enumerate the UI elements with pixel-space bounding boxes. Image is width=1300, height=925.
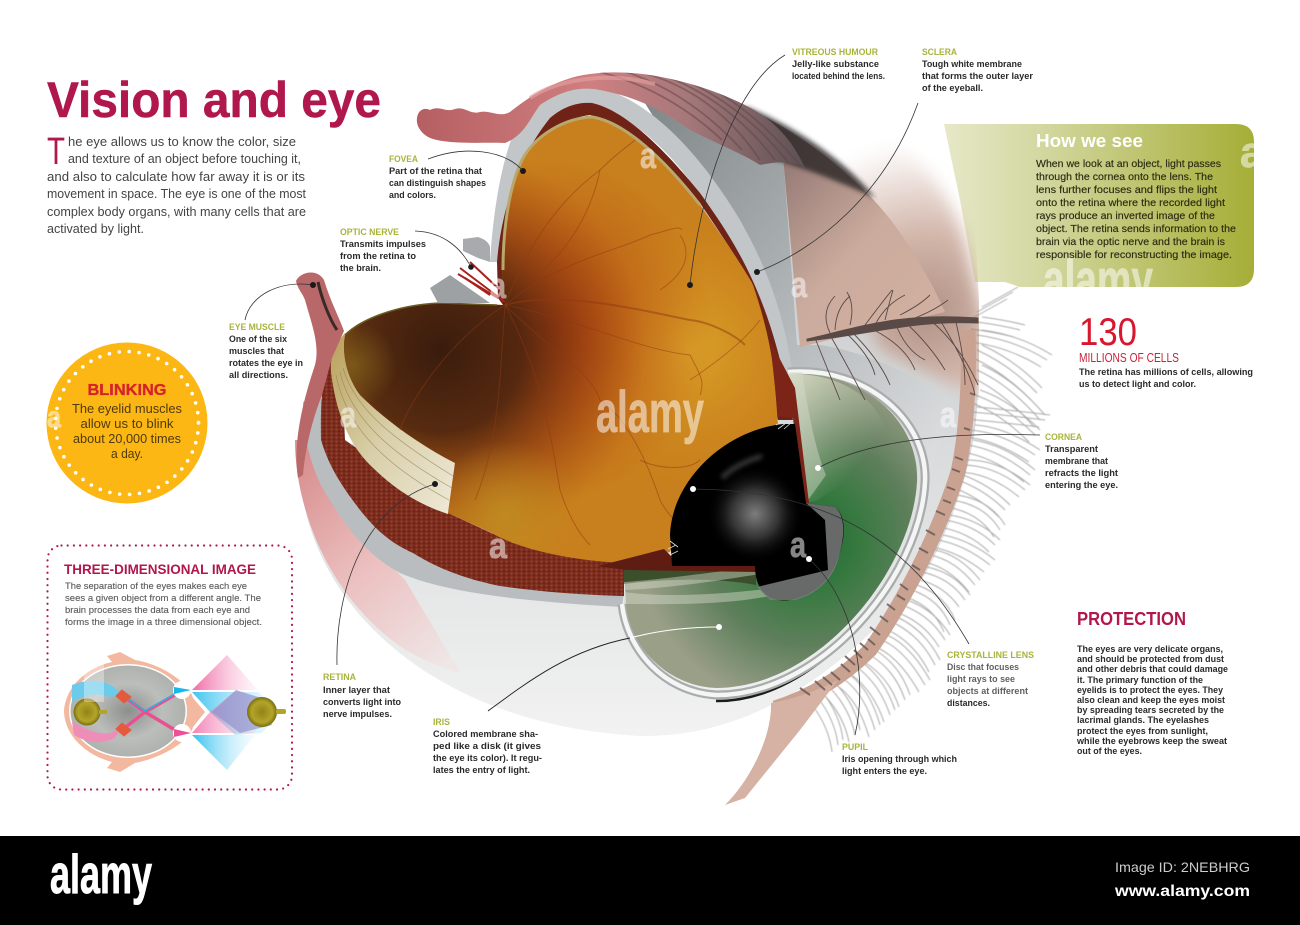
label: fovea: and colors. [389,190,436,200]
text: blinking body [72,401,182,461]
illustration: eye cross-section [235,70,1052,805]
label: fovea [389,151,526,200]
text: three-dimensional body: The separation of the eyes makes each eye [65,581,247,592]
statistic: 130 millions of cells: The retina has millions of cells, allowing [1079,367,1253,377]
image cup in brain [74,698,107,726]
optic chiasm [116,690,180,736]
label: sclera: SCLERA [922,47,957,57]
statistic: 130 millions of cells: us to detect light and color. [1079,379,1196,389]
text block: protection: out of the eyes. [1077,746,1142,756]
label: crystalline lens [690,486,1034,708]
top choroid band [497,103,793,420]
ciliary fibres [668,421,792,555]
label: sclera [754,47,1034,275]
footer logo: alamy [50,843,152,905]
eyes in head [173,681,191,742]
upper eyelid skin panel [720,108,945,347]
label: eye muscle: muscles that [229,346,284,356]
label: cornea: membrane that [1045,456,1108,466]
red strip by the lens [770,340,809,505]
footer url: www.alamy.com [1114,883,1250,900]
text block: protection: by spreading tears secreted by the [1077,705,1224,715]
panel: blinking [46,342,208,504]
label: iris [433,624,722,775]
label: cornea: CORNEA [1045,432,1082,442]
light beams [192,655,282,770]
label: pupil: PUPIL [842,742,868,752]
text: how we see body [1036,158,1236,261]
text: how we see body: brain via the optic nerve and the brain is [1036,236,1225,248]
watermarks: a [490,265,507,306]
label: vitreous humour: Jelly-like substance [792,59,879,69]
optic nerve stumps [430,237,505,303]
iris dark green strip [624,567,756,585]
text: how we see body: When we look at an object, light passes [1036,158,1221,170]
label: retina: RETINA [323,672,356,682]
label: crystalline lens: Disc that focuses [947,662,1019,672]
muscle stripes [600,72,796,162]
label: retina: converts light into [323,697,401,707]
lower pink eye muscle [295,440,460,672]
label: vitreous humour: located behind the lens. [792,71,885,81]
label: optic nerve: the brain. [340,263,381,273]
label: retina [323,481,438,719]
label: iris: ped like a disk (it gives [433,741,541,751]
label: sclera: of the eyeball. [922,83,983,93]
text: how we see body: onto the retina where the recorded light [1036,197,1225,209]
eyelid rim [775,330,968,708]
top band of sclera [490,87,795,420]
crystalline lens [670,424,844,600]
left eye muscle [296,273,344,478]
eyelash base marks [800,393,975,695]
text: three-dimensional body: sees a given object from a different angle. The [65,593,261,604]
text: how we see body: object. The retina sends information to the [1036,223,1236,235]
label: sclera: Tough white membrane [922,59,1022,69]
label: iris: IRIS [433,717,450,727]
text: how we see body: rays produce an inverted image of the [1036,210,1215,222]
upper eyelid soft skin [762,114,979,400]
panel: how we see [944,124,1254,287]
top eye muscle [417,72,805,168]
label: eye muscle: One of the six [229,334,287,344]
label: iris: the eye its color). It regu- [433,753,542,763]
label: eye muscle: EYE MUSCLE [229,322,285,332]
label: optic nerve: Transmits impulses [340,239,426,249]
label: optic nerve [340,227,474,273]
intro text: movement in space. The eye is one of the most [47,187,307,201]
watermarks: a [640,135,657,176]
drop cap: T [47,131,65,173]
label: crystalline lens: objects at different [947,686,1028,696]
panel: three-dimensional image [48,546,292,790]
text: blinking body: about 20,000 times [73,431,181,446]
text block: protection: lacrimal glands. The eyelashes [1077,715,1209,725]
lower sclera cut face [303,395,624,607]
iris green [624,374,917,688]
upper grey sclera surface [640,95,950,470]
text: how we see body: through the cornea onto the lens. The [1036,171,1213,183]
text block: protection: The eyes are very delicate organs, [1077,644,1223,654]
retina interior orange [344,118,778,562]
intro text: activated by light. [47,222,144,236]
label: crystalline lens: light rays to see [947,674,1015,684]
footer image id: Image ID: 2NEBHRG [1115,859,1250,875]
iris pale bands [624,372,826,604]
panel: blinking: a [47,401,61,434]
label: eye muscle: all directions. [229,370,288,380]
label: crystalline lens: distances. [947,698,990,708]
intro text: he eye allows us to know the color, size [68,135,296,149]
label: optic nerve: OPTIC NERVE [340,227,399,237]
text block: protection: and other debris that could damage [1077,664,1228,674]
label: eye muscle: rotates the eye in [229,358,303,368]
label: cornea: refracts the light [1045,468,1118,478]
retinal tan edge [503,117,700,270]
watermarks [340,135,957,566]
intro text: and texture of an object before touching it, [68,152,301,166]
lower eyelid tail [725,680,838,805]
tan retina layer lower [331,333,455,514]
text: blinking body: The eyelid muscles [72,401,182,416]
label: sclera: that forms the outer layer [922,71,1034,81]
label: cornea: entering the eye. [1045,480,1118,490]
heading: blinking: BLINKING [88,382,166,399]
intro text: complex body organs, with many cells that are [47,205,306,219]
eyeball outer body [300,100,978,736]
lower eyelashes [812,287,1052,752]
statistic: 130 millions of cells: MILLIONS OF CELLS [1079,351,1179,365]
label: vitreous humour: VITREOUS HUMOUR [792,47,878,57]
panel: how we see: alamy [1043,248,1153,313]
label: iris: lates the entry of light. [433,765,530,775]
label: fovea: can distinguish shapes [389,178,486,188]
visual field colors [72,681,121,702]
text block: protection: PROTECTION [1077,609,1186,629]
watermarks: alamy [596,380,704,445]
intro text: and also to calculate how far away it is or its [47,170,305,184]
head outline [64,652,205,772]
text block: protection: and should be protected from dust [1077,654,1224,664]
text: how we see body: responsible for reconstructing the image. [1036,249,1232,261]
panel: how we see: a [1240,128,1265,177]
retinal blood vessels [400,140,760,545]
label: vitreous humour [687,47,885,288]
title: Vision and eye [47,72,381,128]
watermarks: a [489,525,508,566]
text: three-dimensional body: brain processes the data from each eye and [65,605,250,616]
text block: protection: while the eyebrows keep the sweat [1076,736,1227,746]
text block: protection: it. The primary function of the [1077,675,1203,685]
heading: three-dimensional image: THREE-DIMENSIONAL IMAGE [64,561,256,577]
watermarks: a [340,394,357,435]
text: blinking body: a day. [111,446,143,461]
text block: protection: eyelids is to protect the eyes. They [1077,685,1223,695]
watermarks: a [791,264,808,305]
watermarks: a [940,394,957,435]
text block: protection [1076,609,1228,756]
text block: protection: protect the eyes from sunlight, [1077,726,1208,736]
label: cornea [815,432,1118,490]
label: fovea: FOVEA [389,154,418,164]
heading: how we see: How we see [1036,131,1143,151]
text: blinking body: allow us to blink [80,416,174,431]
label: fovea: Part of the retina that [389,166,482,176]
text block: protection: also clean and keep the eyes moist [1077,695,1225,705]
text: three-dimensional body [65,581,262,628]
text: three-dimensional body: forms the image in a three dimensional object. [65,617,262,628]
iris outer silver ring [622,372,925,701]
object cup [247,697,286,727]
choroid band lower [321,335,624,596]
label: optic nerve: from the retina to [340,251,417,261]
label: pupil: Iris opening through which [842,754,957,764]
label: pupil [806,556,957,776]
label: retina: nerve impulses. [323,709,392,719]
diagram: head and brain vision [64,652,286,772]
statistic: 130 millions of cells: 130 [1079,311,1137,354]
watermarks: a [790,524,807,565]
footer bar [0,836,1300,925]
intro text [47,131,307,236]
label: pupil: light enters the eye. [842,766,927,776]
label: eye muscle [229,282,316,380]
upper eyelashes [807,290,978,400]
upper eyelid dark ridge [745,106,875,198]
statistic: 130 millions of cells [1079,311,1253,389]
text: how we see body: lens further focuses and flips the light [1036,184,1217,196]
label: cornea: Transparent [1045,444,1098,454]
label: retina: Inner layer that [323,685,390,695]
label: crystalline lens: CRYSTALLINE LENS [947,650,1034,660]
label: iris: Colored membrane sha- [433,729,538,739]
